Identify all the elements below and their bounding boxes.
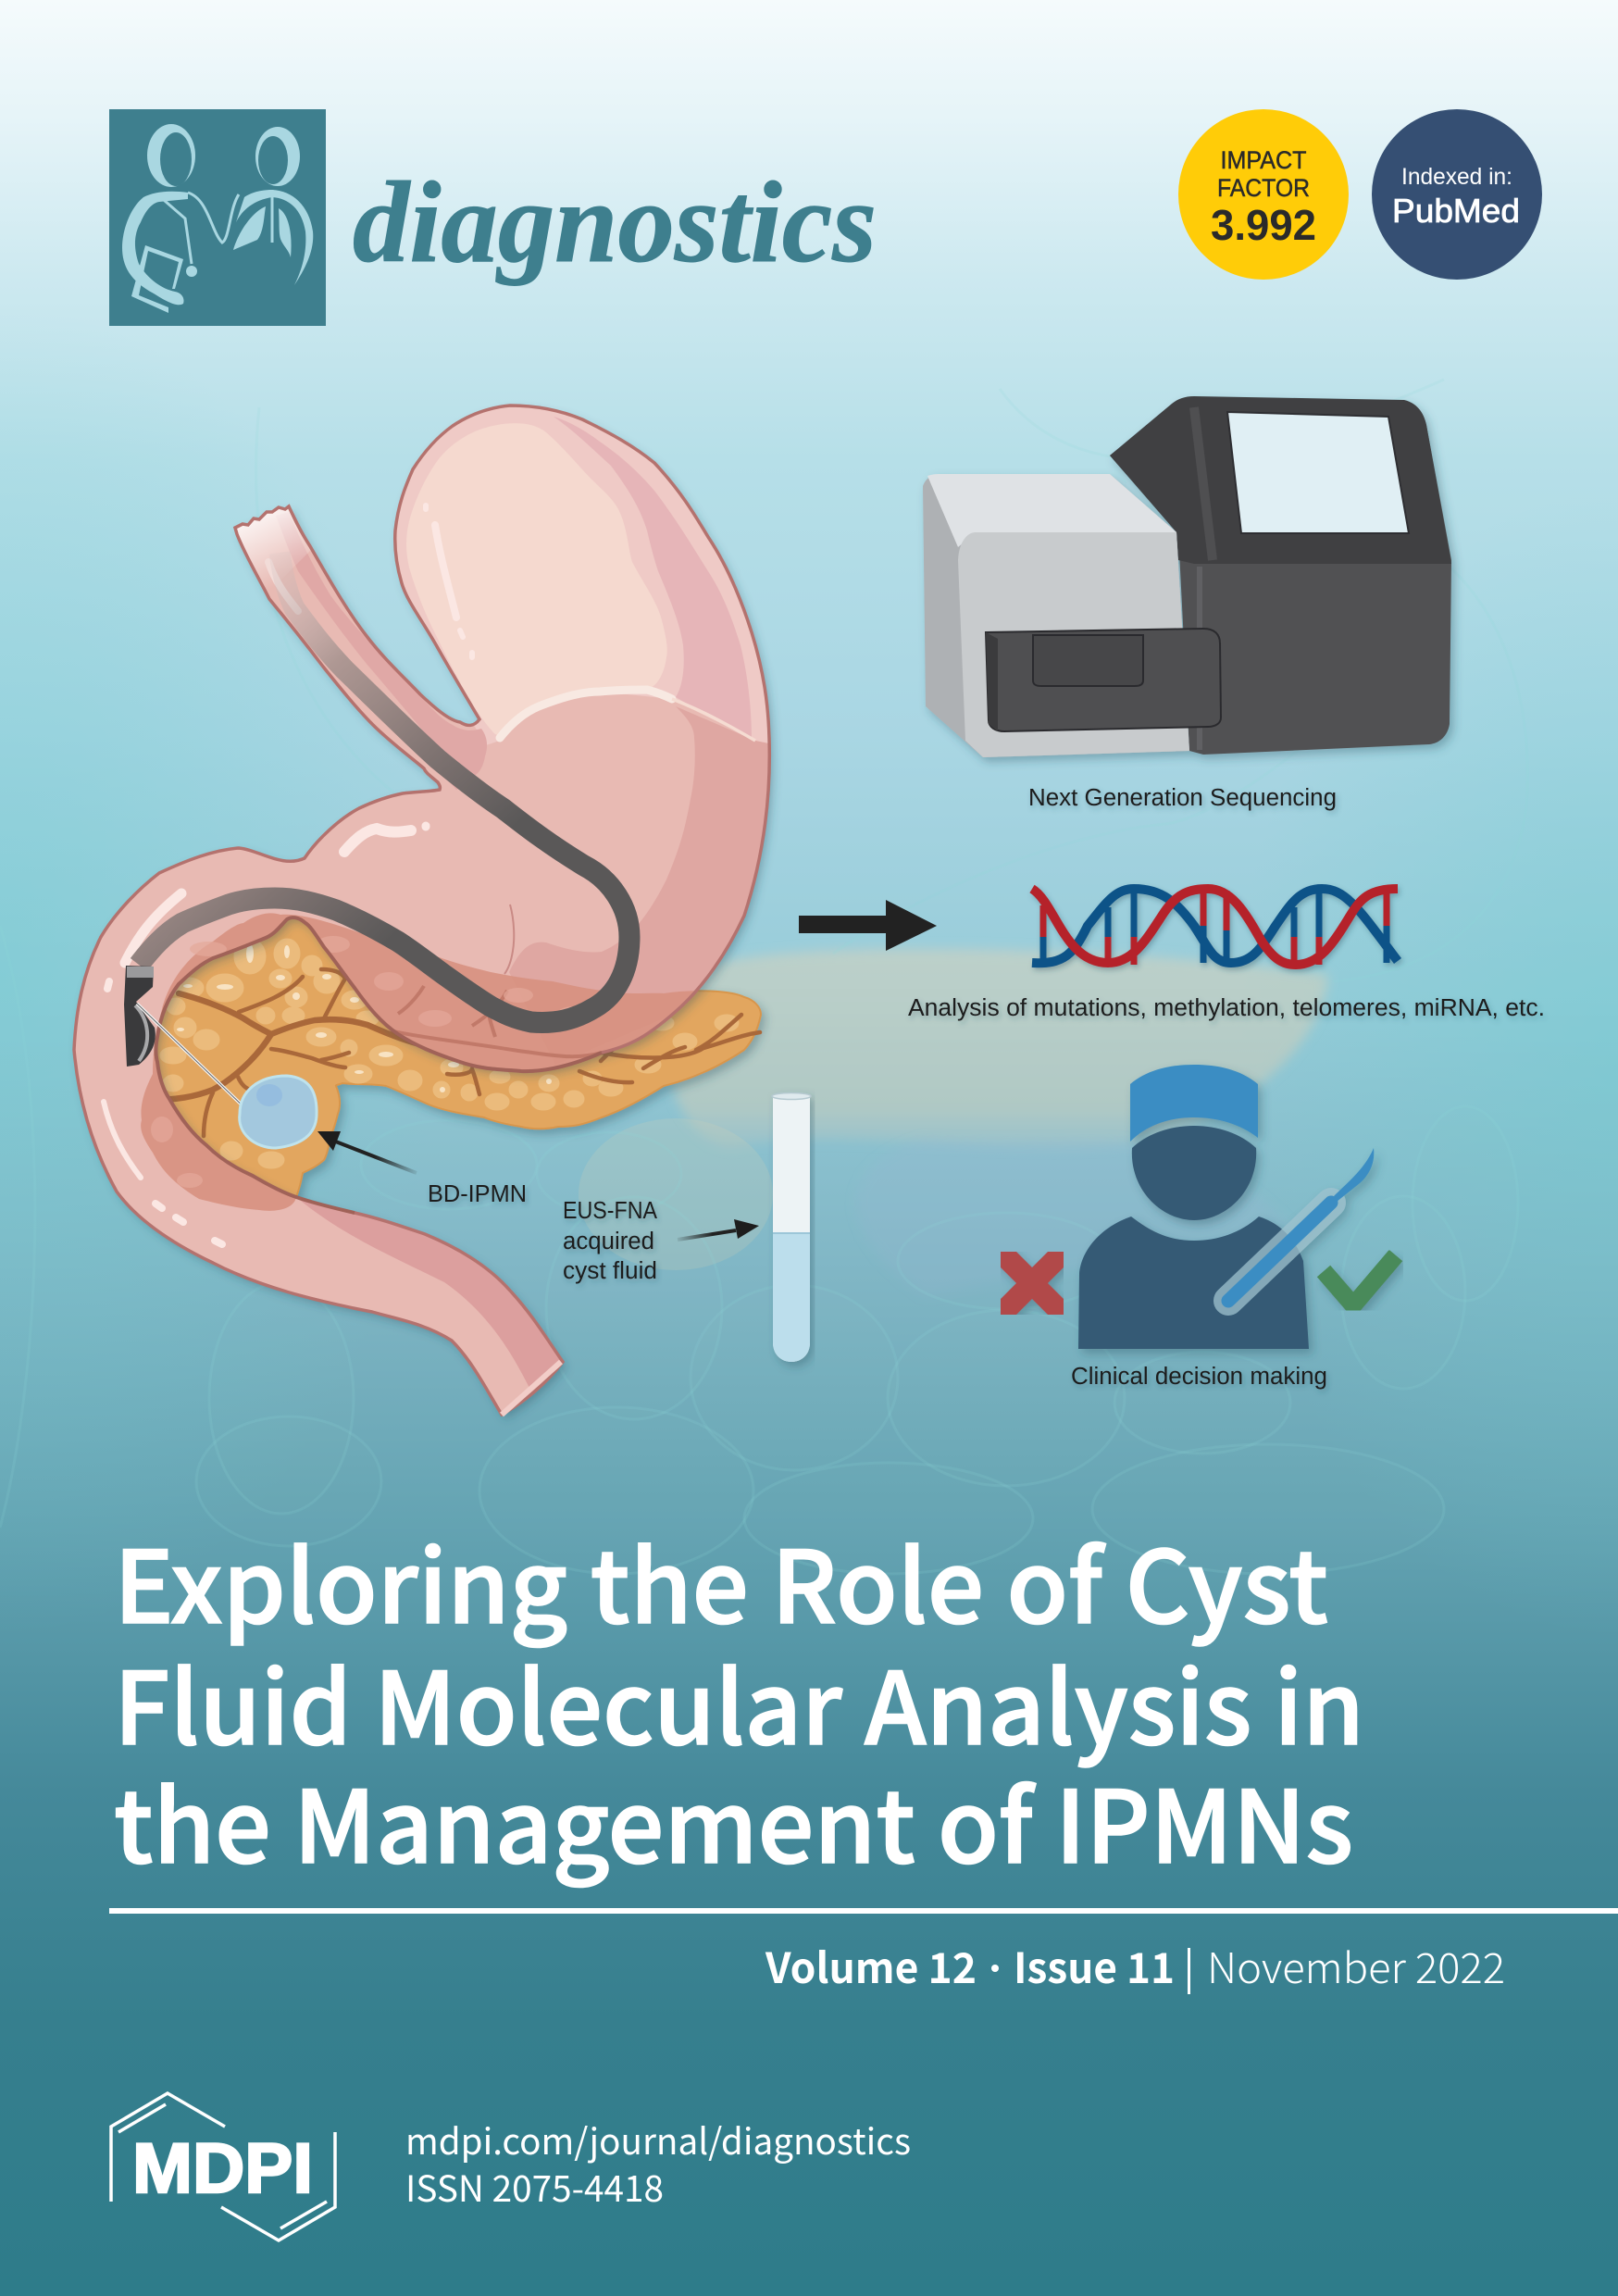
volume issue date: Issue 11 <box>1014 1935 1175 1995</box>
badge: impact factor: IMPACT <box>1220 146 1307 174</box>
main arrow <box>799 900 937 951</box>
volume issue date: November 2022 <box>1207 1935 1505 1995</box>
title rule <box>109 1908 1618 1914</box>
fold line on body <box>504 905 514 974</box>
badge: PubMed <box>1372 109 1542 280</box>
label: BD-IPMN: BD-IPMN <box>428 1181 527 1207</box>
arrow to BD-IPMN <box>317 1131 417 1173</box>
stomach outline <box>74 406 769 1415</box>
endoscope tip <box>124 966 156 1067</box>
pancreas seen through the wall <box>141 913 694 1211</box>
DNA rungs <box>1043 891 1387 965</box>
stomach and duodenum highlights <box>104 505 472 1244</box>
lower right dark band <box>509 707 768 993</box>
stomach fold highlight <box>500 690 672 738</box>
label: EUS-FNA acquired cyst fluid <box>563 1198 657 1284</box>
inner curve edge <box>156 917 602 1213</box>
sequencer machine <box>923 396 1451 757</box>
article title: Exploring the Role of Cyst <box>114 1508 1328 1653</box>
icon: red cross <box>1006 1257 1058 1309</box>
journal logo <box>109 109 326 326</box>
illustration: stomach and duodenum <box>74 398 778 1415</box>
journal URL and ISSN <box>405 2114 911 2213</box>
fundus light area <box>406 423 667 735</box>
badge: impact factor: FACTOR <box>1217 174 1310 202</box>
fundus dark band <box>554 417 752 741</box>
sequencer light housing <box>923 474 1189 757</box>
label: Next Generation Sequencing: Next Generation Sequencing <box>1028 785 1337 811</box>
pancreas highlights <box>177 944 552 1092</box>
badge: PubMed: Indexed in: <box>1401 164 1512 190</box>
journal URL and ISSN: mdpi.com/journal/diagnostics <box>405 2114 911 2165</box>
DNA helix <box>1032 889 1398 965</box>
journal name: diagnostics <box>353 159 877 287</box>
cap <box>1130 1065 1258 1142</box>
esophagus dark band <box>276 512 487 790</box>
stomach shading <box>141 398 778 1393</box>
pink lobules <box>151 936 591 1188</box>
badge: impact factor: 3.992 <box>1211 201 1316 249</box>
head <box>1132 1126 1256 1220</box>
ducts seen through the wall <box>396 985 602 1059</box>
volume issue date: Volume 12 <box>765 1935 977 1995</box>
article title: the Management of IPMNs <box>114 1748 1353 1892</box>
fundus rim <box>384 398 778 745</box>
arrow to test tube <box>678 1219 759 1240</box>
dark instrument <box>1110 401 1451 755</box>
journal URL and ISSN: ISSN 2075-4418 <box>405 2161 664 2213</box>
pancreas lobules <box>163 942 736 1166</box>
shoulders <box>1078 1217 1309 1349</box>
duodenum dark band <box>296 1197 565 1393</box>
MDPI logo <box>111 2093 335 2240</box>
screen <box>1227 412 1409 533</box>
article title: Fluid Molecular Analysis in <box>114 1629 1364 1774</box>
surgeon icon <box>1078 1065 1374 1349</box>
article title <box>114 1508 1364 1892</box>
badge: impact factor <box>1178 109 1349 280</box>
badge: PubMed: PubMed <box>1392 192 1520 230</box>
scalpel <box>1228 1148 1374 1301</box>
needle <box>137 1004 253 1116</box>
sequencer tray <box>986 629 1221 731</box>
esophagus top fade <box>237 509 311 582</box>
label: EUS-FNA acquired cyst fluid: EUS-FNA <box>563 1198 657 1224</box>
doctor and patient figures <box>122 124 313 313</box>
faint background organs <box>0 380 1527 1574</box>
icon: green check <box>1324 1255 1396 1305</box>
MDPI logo: MDPI <box>132 2129 313 2208</box>
label: analysis: Analysis of mutations, methylation, telomeres, miRNA, etc. <box>908 995 1545 1021</box>
label: EUS-FNA acquired cyst fluid: cyst fluid <box>563 1258 657 1284</box>
illustration: pancreas <box>141 913 761 1211</box>
pancreatic ducts <box>151 969 760 1136</box>
cyst <box>240 1076 317 1148</box>
endoscope <box>124 553 629 1116</box>
volume issue date <box>765 1935 1505 1995</box>
label: EUS-FNA acquired cyst fluid: acquired <box>563 1229 654 1254</box>
label: clinical decision making: Clinical decision making <box>1071 1364 1327 1390</box>
test tube <box>772 1092 811 1362</box>
